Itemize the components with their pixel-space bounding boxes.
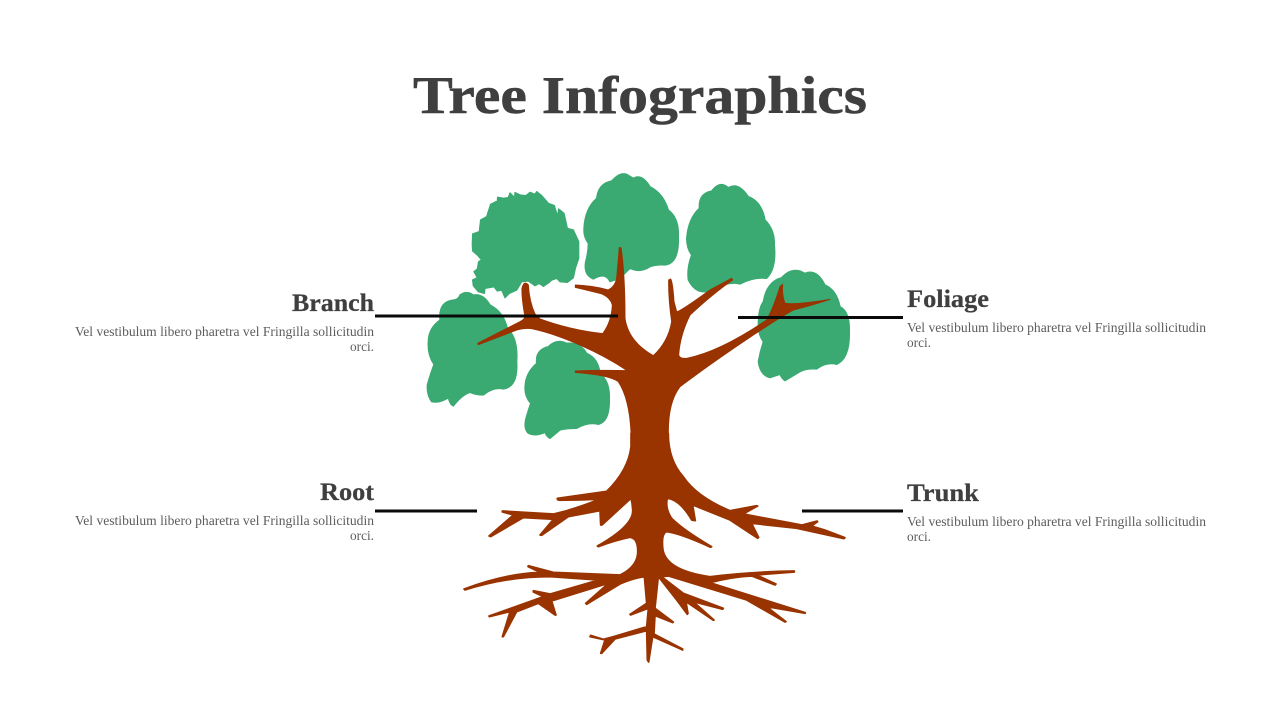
body text: Root: Vel vestibulum libero pharetra vel Fringilla sollicitudin: [75, 513, 374, 528]
trunk and branches: [478, 248, 830, 452]
foliage clusters: [427, 174, 849, 438]
title: Tree Infographics: [413, 67, 867, 125]
label: Branch: [75, 290, 618, 354]
foliage: upper left jagged crown: [472, 192, 579, 298]
foliage: top right crown: [687, 185, 775, 292]
heading: Foliage: Foliage: [907, 286, 989, 313]
label: Trunk: [802, 480, 1206, 544]
leader line: Root: [375, 510, 477, 512]
roots: [464, 433, 845, 662]
body text: Branch: Vel vestibulum libero pharetra vel Fringilla sollicitudin: [75, 324, 374, 339]
body text: Root: orci.: [350, 528, 374, 543]
tree illustration: [427, 174, 849, 662]
heading: Root: Root: [320, 479, 375, 506]
leader line: Foliage: [738, 316, 903, 319]
label: Foliage: [738, 286, 1206, 350]
foliage: far right crown: [758, 270, 849, 381]
foliage: far left crown: [427, 292, 517, 406]
foliage: top center crown: [584, 174, 678, 282]
leader line: Trunk: [802, 510, 903, 512]
body text: Branch: orci.: [350, 339, 374, 354]
body text: Foliage: orci.: [907, 335, 931, 350]
heading: Branch: Branch: [292, 290, 374, 317]
leader line: Branch: [375, 314, 618, 318]
heading: Trunk: Trunk: [907, 480, 979, 507]
foliage: lower center crown: [525, 341, 609, 438]
label: Root: [75, 479, 477, 543]
body text: Foliage: Vel vestibulum libero pharetra vel Fringilla sollicitudin: [907, 320, 1206, 335]
body text: Trunk: Vel vestibulum libero pharetra vel Fringilla sollicitudin: [907, 514, 1206, 529]
body text: Trunk: orci.: [907, 529, 931, 544]
